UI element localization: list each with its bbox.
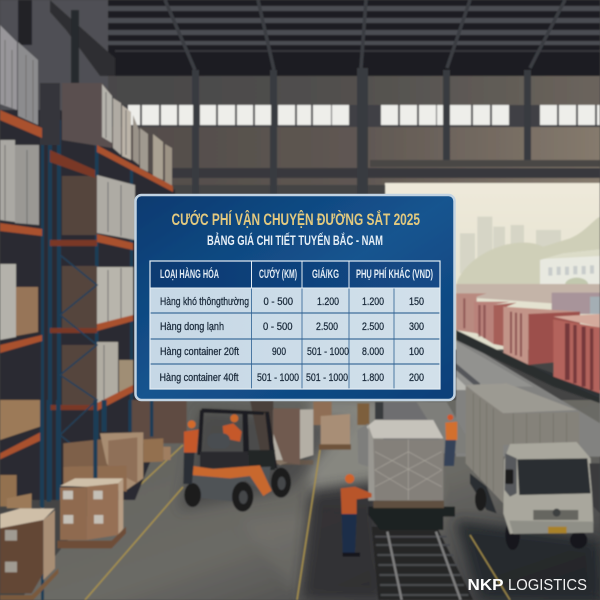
logo: NKP Logistics	[468, 577, 587, 594]
row: Hàng container 40ft: 1.800	[362, 372, 384, 384]
row: Hàng dong lạnh: 0 - 500	[263, 321, 292, 333]
back cartons near rail	[272, 402, 384, 465]
row: Hàng dong lạnh	[160, 321, 424, 333]
rail side track	[417, 402, 467, 453]
right-side rail	[589, 463, 600, 513]
windows	[128, 105, 600, 125]
title: CƯỚC PHÍ VẬN CHUYỆN ĐƯỜNG SẮT 2025	[172, 210, 420, 229]
gravel and rail ground	[456, 337, 600, 457]
pricing table	[150, 261, 440, 389]
row: Hàng khó thông thường: 1.200	[362, 296, 384, 308]
row: Hàng container 40ft	[160, 372, 424, 384]
worker beside forklift	[183, 420, 199, 484]
table header: PHỤ PHÍ KHÁC (VND)	[356, 268, 433, 281]
front pallet	[0, 508, 58, 600]
row: Hàng container 20ft	[160, 346, 424, 358]
freight train wagons	[456, 284, 600, 403]
worker behind truck	[444, 414, 457, 466]
row: Hàng dong lạnh: Hàng dong lạnh	[160, 321, 224, 333]
truck	[466, 383, 593, 550]
upper rack stock	[0, 25, 172, 186]
row: Hàng khó thông thường: 1.200	[317, 296, 339, 308]
train, truck and workers	[341, 383, 600, 600]
price table card	[136, 195, 454, 400]
logo: NKP Logistics: LOGISTICS	[508, 577, 587, 594]
card background	[136, 195, 454, 400]
table header	[150, 261, 440, 288]
forklift	[184, 408, 291, 512]
left pallet racking	[0, 25, 175, 600]
table header: LOẠI HÀNG HÓA	[160, 268, 219, 281]
wrapped pallet right	[273, 408, 300, 465]
table header: GIÁ/KG	[312, 268, 339, 281]
worker at train	[341, 474, 372, 557]
row: Hàng khó thông thường: Hàng khó thôngthường	[160, 296, 249, 308]
middle rack stock	[0, 140, 135, 408]
row: Hàng dong lạnh: 300	[409, 321, 424, 333]
row: Hàng container 40ft: Hàng container 40ft	[160, 372, 238, 384]
row: Hàng dong lạnh: 2.500	[362, 321, 384, 333]
row: Hàng container 40ft: 200	[409, 372, 424, 384]
table header: CƯỚY (KM)	[259, 268, 297, 281]
row: Hàng khó thông thường	[160, 296, 424, 308]
back wall	[0, 68, 600, 198]
logo: NKP Logistics: NKP	[468, 577, 504, 594]
flatcar with wrapped cargo	[357, 420, 455, 530]
racking uprights back	[41, 110, 133, 600]
table grid lines	[150, 261, 440, 389]
orange rack beams	[0, 110, 173, 411]
row: Hàng container 20ft: 8.000	[362, 346, 384, 358]
row: Hàng khó thông thường: 150	[409, 296, 424, 308]
rack diagonal bracing	[60, 255, 97, 465]
floor	[20, 400, 600, 600]
left wall	[0, 0, 115, 110]
row: Hàng container 20ft: 100	[409, 346, 424, 358]
wrapped stock sheen lines	[5, 40, 126, 400]
row: Hàng container 20ft: 501 - 1000	[307, 346, 349, 358]
floor yellow lines	[85, 445, 510, 600]
railway track	[372, 527, 473, 600]
ceiling	[0, 0, 600, 78]
row: Hàng khó thông thường: 0 - 500	[264, 296, 293, 308]
shelf and boxes	[0, 400, 273, 467]
row: Hàng container 40ft: 501 - 1000	[306, 372, 348, 384]
rear rack beams	[50, 150, 97, 410]
row: Hàng container 40ft: 501 - 1000	[257, 372, 299, 384]
stacked cartons back	[0, 432, 171, 508]
rear opening with outdoor view	[385, 183, 600, 350]
lower left pallets and forklift	[0, 400, 300, 600]
middle pallet	[57, 478, 126, 548]
subtitle: BẢNG GIÁ CHI TIẾT TUYẾN BẮC - NAM	[207, 233, 383, 248]
row: Hàng container 20ft: 900	[272, 346, 286, 358]
row: Hàng dong lạnh: 2.500	[316, 321, 338, 333]
rack shadow depth	[0, 110, 175, 500]
row: Hàng container 20ft: Hàng container 20ft	[160, 346, 239, 358]
floor light and shadow	[180, 400, 600, 600]
rack posts	[40, 400, 153, 507]
table body cells	[150, 288, 440, 389]
